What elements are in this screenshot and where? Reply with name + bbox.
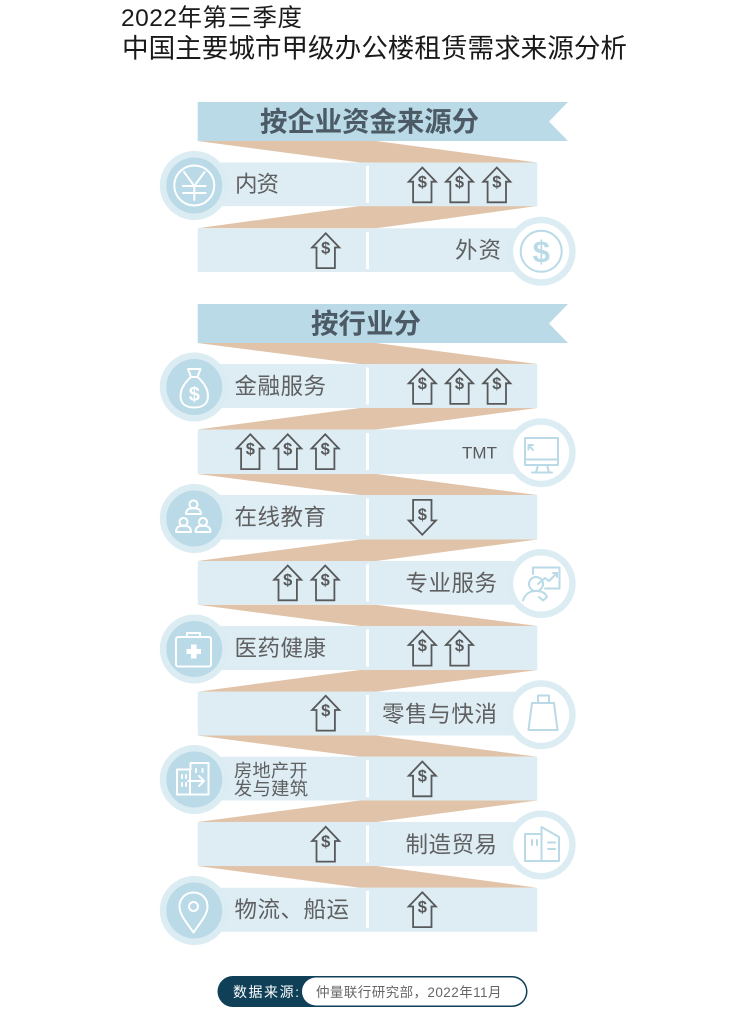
arrows up x3 <box>237 434 339 469</box>
row: finance <box>160 352 537 422</box>
label: 专业服务 <box>406 571 497 596</box>
arrows up x3: $ <box>492 375 501 393</box>
icon: people <box>160 484 229 553</box>
connector bands <box>198 141 537 228</box>
arrows up x2 <box>274 566 339 600</box>
label: 内资 <box>235 172 279 197</box>
icon: office buildings <box>507 810 576 880</box>
label: TMT <box>462 444 497 462</box>
panel: by capital source <box>160 102 576 286</box>
arrow up x1: $ <box>418 898 427 916</box>
arrow up x1 <box>312 827 339 862</box>
arrows up x3: $ <box>418 375 427 393</box>
title <box>121 4 627 64</box>
label: 零售与快消 <box>382 702 497 727</box>
arrow up x1: $ <box>321 702 330 720</box>
connector bands <box>198 343 537 888</box>
arrows up x3: $ <box>321 440 330 458</box>
icon: location pin <box>160 876 229 945</box>
source footer <box>218 976 528 1007</box>
label: 发与建筑 <box>234 778 308 799</box>
arrows up x2: $ <box>321 572 330 590</box>
icon: building with arrow <box>160 745 229 814</box>
icon: dollar: $ <box>533 234 550 269</box>
arrows up x2: $ <box>455 637 464 655</box>
source label: 数据来源: <box>233 984 299 1000</box>
icon: person with chart <box>507 549 576 618</box>
label: 外资 <box>455 238 501 263</box>
arrow down x1 <box>409 500 436 535</box>
icon: money bag: $ <box>189 384 200 406</box>
heading ribbon: 按行业分 <box>311 308 421 339</box>
label: 房地产开 <box>234 760 308 781</box>
arrow up x1 <box>409 892 436 927</box>
heading ribbon: 按企业资金来源分 <box>260 106 479 137</box>
row: real estate and construction <box>160 745 537 814</box>
arrows up x3: $ <box>283 440 292 458</box>
arrow up x1: $ <box>321 240 330 258</box>
row: foreign capital <box>198 217 576 286</box>
arrow up x1 <box>312 233 339 268</box>
row: domestic capital <box>160 151 537 220</box>
icon: money bag <box>160 352 229 422</box>
row: logistics and shipping <box>160 876 537 945</box>
arrows up x3 <box>409 369 510 404</box>
arrows up x3: $ <box>455 375 464 393</box>
title: 中国主要城市甲级办公楼租赁需求来源分析 <box>122 34 627 64</box>
row: TMT <box>198 418 576 487</box>
source value pill <box>302 978 526 1006</box>
icon: monitor <box>507 418 576 487</box>
label: 物流、船运 <box>234 898 349 922</box>
arrow down x1: $ <box>418 506 427 524</box>
row: manufacturing and trade <box>198 810 576 880</box>
icon: shopping bag <box>507 680 576 749</box>
arrows up x3: $ <box>492 174 501 192</box>
source text: 仲量联行研究部，2022年11月 <box>316 985 502 1000</box>
panel: by industry <box>160 304 576 945</box>
label: 在线教育 <box>234 505 326 530</box>
label <box>234 760 308 799</box>
icon: dollar <box>507 217 576 286</box>
row: professional services <box>198 549 576 618</box>
title: 2022年第三季度 <box>121 4 302 32</box>
arrows up x2: $ <box>418 637 427 655</box>
icon: yen <box>160 151 229 220</box>
icon: medical kit <box>160 614 229 684</box>
row: retail and FMCG <box>198 680 576 749</box>
arrows up x3: $ <box>246 440 255 458</box>
arrows up x2: $ <box>283 572 292 590</box>
heading ribbon <box>198 304 568 343</box>
arrows up x3: $ <box>455 174 464 192</box>
arrows up x2 <box>409 631 473 666</box>
label: 制造贸易 <box>406 832 497 858</box>
arrow up x1: $ <box>418 768 427 786</box>
arrow up x1 <box>312 696 339 731</box>
label: 金融服务 <box>234 374 326 399</box>
row: healthcare <box>160 614 537 684</box>
heading ribbon <box>198 102 568 141</box>
label: 医药健康 <box>234 636 326 661</box>
arrows up x3: $ <box>418 174 427 192</box>
arrow up x1: $ <box>321 833 330 851</box>
arrow up x1 <box>409 762 436 796</box>
row: online education <box>160 484 537 553</box>
arrows up x3 <box>409 168 510 202</box>
